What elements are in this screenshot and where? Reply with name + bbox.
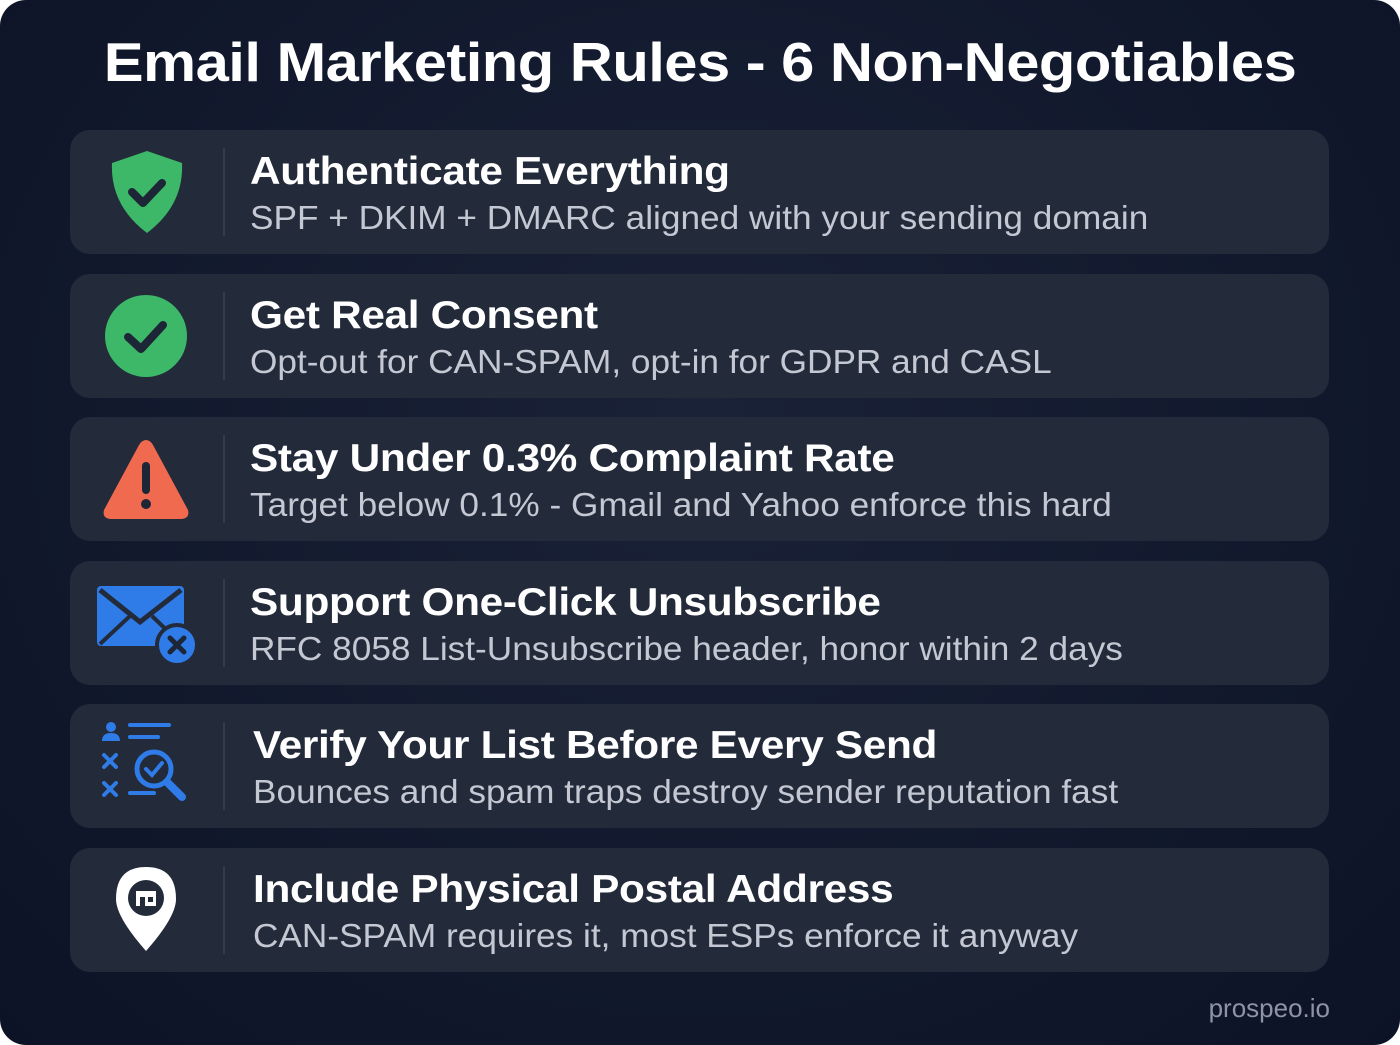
text: SPF + DKIM + DMARC aligned with your sending domain	[250, 199, 1148, 236]
icon: warning triangle	[104, 440, 188, 519]
text: CAN-SPAM requires it, most ESPs enforce it anyway	[253, 917, 1078, 954]
icon: shield check	[112, 151, 182, 233]
heading: Authenticate Everything	[250, 150, 730, 193]
text: Opt-out for CAN-SPAM, opt-in for GDPR and CASL	[250, 343, 1052, 380]
panel: authenticate	[70, 130, 1329, 254]
icon: location pin	[116, 867, 176, 951]
text: Bounces and spam traps destroy sender reputation fast	[253, 773, 1118, 810]
title: Email Marketing Rules - 6 Non-Negotiables	[104, 31, 1296, 93]
icon: check circle	[105, 295, 187, 377]
panel: verify list	[70, 704, 1329, 828]
panel: unsubscribe	[70, 561, 1329, 685]
heading: Verify Your List Before Every Send	[253, 724, 937, 767]
heading: Include Physical Postal Address	[253, 868, 893, 911]
panel: complaint rate	[70, 417, 1329, 541]
footer: brand: prospeo.io	[1209, 993, 1330, 1023]
text: RFC 8058 List-Unsubscribe header, honor within 2 days	[250, 630, 1123, 667]
heading: Stay Under 0.3% Complaint Rate	[250, 437, 895, 480]
text: Target below 0.1% - Gmail and Yahoo enforce this hard	[250, 486, 1112, 523]
panel: consent	[70, 274, 1329, 398]
icon: envelope x	[97, 586, 195, 663]
icon: list search	[102, 722, 186, 801]
heading: Support One-Click Unsubscribe	[250, 581, 881, 624]
panel: postal address	[70, 848, 1329, 972]
heading: Get Real Consent	[250, 294, 598, 337]
